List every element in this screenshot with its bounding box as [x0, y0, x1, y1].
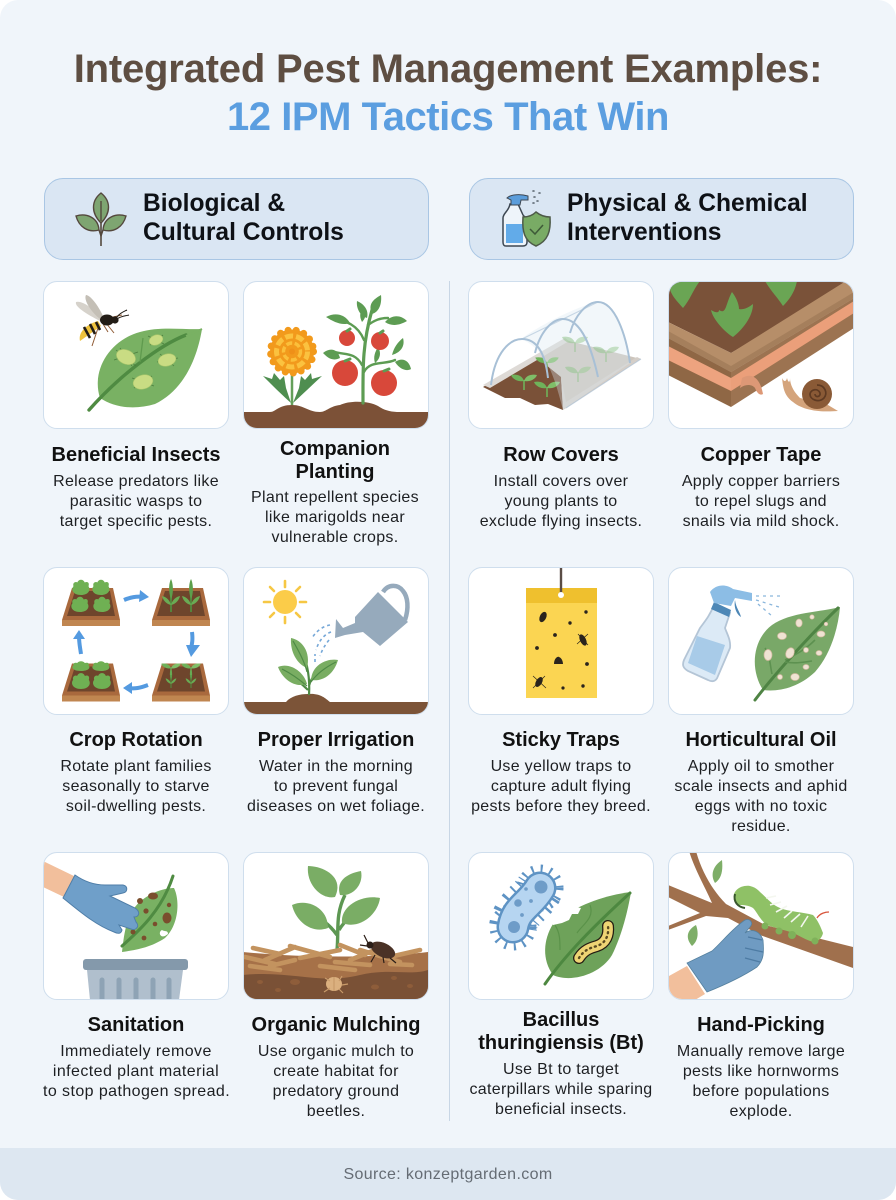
card text: copper tape [682, 473, 840, 530]
soil [243, 402, 428, 430]
card text: organic mulching: Use organic mulch to [258, 1043, 414, 1060]
card text: copper tape: Apply copper barriers [682, 473, 840, 490]
card text: crop rotation: soil-dwelling pests. [66, 798, 206, 815]
spray bottle [683, 586, 782, 681]
card text: proper irrigation: to prevent fungal [274, 778, 398, 795]
source text: Source: konzeptgarden.com [343, 1166, 553, 1183]
panel heading: biological and cultural controls: Cultural Controls [143, 218, 344, 246]
card image: sanitation [43, 852, 229, 1000]
card text: proper irrigation: Water in the morning [259, 758, 413, 775]
hornworm caterpillar [734, 886, 829, 944]
card text: organic mulching: beetles. [307, 1103, 365, 1120]
card text: companion planting: vulnerable crops. [272, 529, 398, 546]
caterpillar [579, 926, 608, 958]
ground beetles [324, 935, 398, 993]
card image: row covers [468, 281, 654, 429]
card text: hand-picking: explode. [730, 1103, 792, 1120]
title: Integrated Pest Management Examples: [74, 47, 822, 91]
chewed leaf [545, 892, 631, 984]
marigold [263, 330, 322, 405]
title: 12 IPM Tactics That Win [227, 95, 669, 139]
card text: bacillus thuringiensis: caterpillars while sparing [470, 1081, 652, 1098]
card image: sticky traps [468, 567, 654, 715]
basket [83, 959, 188, 1000]
card image: companion planting [243, 281, 429, 429]
card image: organic mulching [243, 852, 429, 1000]
panel heading: biological and cultural controls: Biological & [143, 190, 285, 217]
card text: companion planting: Plant repellent species [251, 489, 419, 506]
gloved hand [687, 920, 763, 992]
sprouts under cover [511, 337, 619, 397]
yellow trap [526, 566, 597, 698]
card text: copper tape: snails via mild shock. [683, 513, 839, 530]
card text: row covers [480, 473, 642, 530]
card text: beneficial insects: target specific pests. [60, 513, 212, 530]
card image: beneficial insects [43, 281, 229, 429]
card text: hand-picking: Manually remove large [677, 1043, 845, 1060]
card text: sanitation: Immediately remove [60, 1043, 212, 1060]
card title: bacillus thuringiensis: Bacillus [523, 1009, 599, 1031]
branch [668, 851, 853, 968]
card title: organic mulching: Organic Mulching [252, 1014, 420, 1036]
card title: sanitation: Sanitation [88, 1014, 184, 1036]
card title: hand-picking: Hand-Picking [697, 1014, 825, 1036]
card text: horticultural oil: scale insects and aphid [674, 778, 848, 795]
card text: companion planting: like marigolds near [265, 509, 405, 526]
water drops [312, 625, 331, 662]
card title: copper tape: Copper Tape [701, 444, 821, 466]
card text: bacillus thuringiensis: Use Bt to target [503, 1061, 619, 1078]
card text: hand-picking: before populations [692, 1083, 830, 1100]
card text: beneficial insects [53, 473, 219, 530]
card text: beneficial insects: parasitic wasps to [70, 493, 202, 510]
card image: proper irrigation [243, 567, 429, 715]
arm [43, 861, 76, 897]
card image: bacillus thuringiensis [468, 852, 654, 1000]
card text: beneficial insects: Release predators like [53, 473, 219, 490]
card text: crop rotation: seasonally to starve [62, 778, 210, 795]
icon: spray bottle and shield [502, 190, 551, 247]
footer source bar [0, 1148, 896, 1200]
card text: row covers: Install covers over [494, 473, 628, 490]
icon: three-leaf plant [75, 192, 127, 246]
sprouts [669, 281, 797, 337]
plant [292, 866, 380, 950]
card title: proper irrigation: Proper Irrigation [258, 729, 414, 751]
card title: companion planting: Companion [280, 438, 390, 460]
soil and mulch [243, 945, 428, 1000]
translucent cover and hoops [491, 302, 641, 410]
card text: organic mulching: create habitat for [273, 1063, 399, 1080]
card title: bacillus thuringiensis: thuringiensis (Bt) [478, 1032, 644, 1054]
card title: crop rotation: Crop Rotation [69, 729, 203, 751]
card text: sanitation [43, 1043, 230, 1100]
card title: bacillus thuringiensis [478, 1009, 644, 1054]
card text: horticultural oil [674, 758, 848, 835]
rotation arrows [73, 590, 200, 694]
card text: crop rotation: Rotate plant families [60, 758, 212, 775]
diseased leaf [122, 876, 177, 952]
bacterium [494, 869, 559, 946]
blue glove [63, 875, 139, 933]
card image: copper tape [668, 281, 854, 429]
raised bed [668, 281, 854, 407]
panel heading: physical and chemical interventions [469, 178, 854, 260]
card title: row covers: Row Covers [503, 444, 619, 466]
card text: sticky traps: capture adult flying [491, 778, 631, 795]
small leaves [688, 860, 722, 946]
panel heading: physical and chemical interventions: Interventions [567, 218, 721, 246]
card text: hand-picking: pests like hornworms [683, 1063, 839, 1080]
tomato plant [323, 295, 411, 403]
card image: horticultural oil [668, 567, 854, 715]
card text: proper irrigation [247, 758, 425, 815]
card text: row covers: young plants to [504, 493, 618, 510]
card text: horticultural oil: residue. [731, 818, 791, 835]
card text: proper irrigation: diseases on wet foliage. [247, 798, 425, 815]
trapped insects [533, 610, 589, 690]
card text: row covers: exclude flying insects. [480, 513, 642, 530]
card text: bacillus thuringiensis: beneficial insects. [495, 1101, 627, 1118]
card text: bacillus thuringiensis [470, 1061, 652, 1118]
arm [669, 966, 705, 1000]
card image: crop rotation [43, 567, 229, 715]
leaf with aphids [89, 329, 202, 410]
divider line [448, 281, 450, 1121]
soil [243, 694, 428, 715]
card text: horticultural oil: Apply oil to smother [688, 758, 834, 775]
card title: horticultural oil: Horticultural Oil [685, 729, 837, 751]
card image: hand-picking [668, 852, 854, 1000]
plant [278, 638, 338, 695]
panel heading: physical and chemical interventions: Physical & Chemical [567, 190, 808, 217]
card text: sticky traps: pests before they breed. [471, 798, 651, 815]
card text: companion planting [251, 489, 419, 546]
panel heading: biological and cultural controls [44, 178, 429, 260]
card text: sanitation: to stop pathogen spread. [43, 1083, 230, 1100]
sun [264, 581, 306, 623]
card text: sanitation: infected plant material [53, 1063, 219, 1080]
card title: companion planting: Planting [296, 461, 374, 483]
copper tape curl [740, 376, 763, 395]
card text: organic mulching [258, 1043, 414, 1120]
leaf with scale insects [755, 607, 840, 700]
bed [483, 338, 641, 410]
card title: companion planting [280, 438, 390, 483]
watering can [335, 586, 408, 646]
card title: beneficial insects: Beneficial Insects [52, 444, 220, 466]
card text: crop rotation [60, 758, 212, 815]
snail [782, 378, 838, 411]
four beds [62, 579, 210, 702]
card text: copper tape: to repel slugs and [695, 493, 827, 510]
wasp [76, 295, 129, 346]
title [74, 47, 822, 139]
card text: sticky traps: Use yellow traps to [491, 758, 631, 775]
card text: sticky traps [471, 758, 651, 815]
card text: organic mulching: predatory ground [273, 1083, 399, 1100]
card text: hand-picking [677, 1043, 845, 1120]
card title: sticky traps: Sticky Traps [502, 729, 620, 751]
card text: horticultural oil: eggs with no toxic [695, 798, 827, 815]
